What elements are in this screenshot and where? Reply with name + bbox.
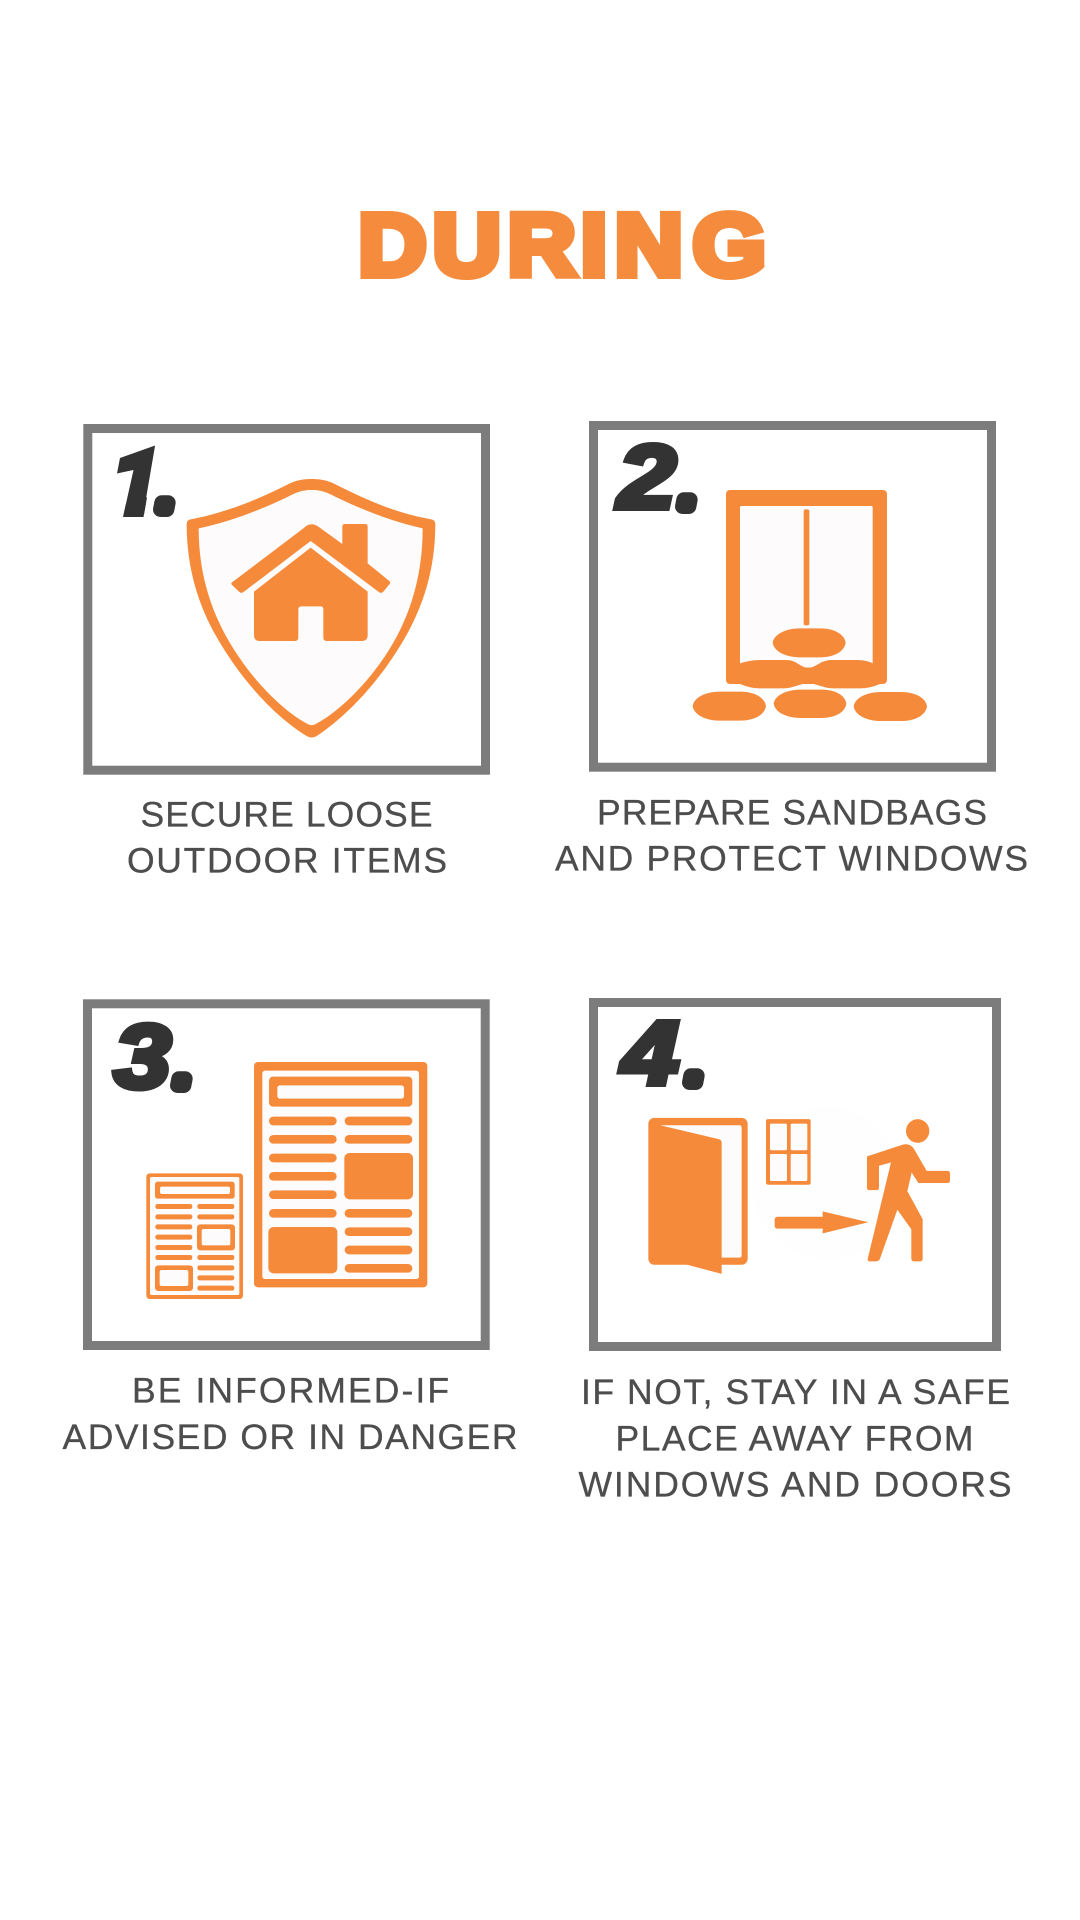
step number 3: . <box>176 1044 189 1096</box>
step number 2: . <box>682 466 694 516</box>
step number 3 <box>114 1008 189 1108</box>
large newspaper <box>254 1062 427 1287</box>
caption 4: WINDOWS AND DOORS <box>578 1465 1012 1505</box>
panel frame 4 <box>594 1002 996 1346</box>
caption 2: PREPARE SANDBAGS <box>597 792 987 832</box>
small newspaper <box>146 1173 243 1299</box>
icon: window with sandbags <box>693 490 927 721</box>
caption 3: ADVISED OR IN DANGER <box>62 1417 518 1457</box>
caption 1: SECURE LOOSE <box>140 795 432 835</box>
icon: exit door, window, arrow and walking person <box>648 1107 950 1274</box>
step number 1 <box>117 446 176 517</box>
panel frame 2 <box>594 426 992 767</box>
caption 1: OUTDOOR ITEMS <box>127 841 447 881</box>
icon: newspapers <box>146 1062 427 1299</box>
caption 2 <box>555 792 1028 879</box>
caption 2: AND PROTECT WINDOWS <box>555 839 1028 879</box>
panel frame 3 <box>88 1004 485 1346</box>
caption 3 <box>62 1371 518 1457</box>
step number 2: 2 <box>616 428 676 528</box>
icon: house in shield <box>187 479 435 738</box>
walking person <box>867 1119 950 1261</box>
step number 1: 1 <box>112 434 156 534</box>
panel: step 3 be informed <box>62 1004 518 1457</box>
panel: step 1 secure outdoor items <box>88 428 486 881</box>
step number 4: 4 <box>620 1004 679 1104</box>
step number 2 <box>616 428 694 528</box>
step number 1: . <box>160 468 172 520</box>
caption 4 <box>578 1372 1012 1505</box>
caption 1 <box>127 795 447 881</box>
panel: step 4 stay away from windows and doors <box>578 1002 1012 1505</box>
arrow <box>775 1211 868 1233</box>
door <box>648 1107 902 1274</box>
caption 4: PLACE AWAY FROM <box>616 1419 974 1459</box>
step number 4 <box>620 1004 701 1104</box>
title: DURING <box>359 197 766 294</box>
panel: step 2 sandbags and windows <box>555 426 1028 879</box>
caption 3: BE INFORMED-IF <box>132 1371 449 1411</box>
window <box>766 1119 811 1185</box>
caption 4: IF NOT, STAY IN A SAFE <box>581 1372 1010 1412</box>
step number 4: . <box>688 1042 701 1092</box>
panel frame 1 <box>88 428 486 770</box>
step number 3: 3 <box>114 1008 171 1108</box>
